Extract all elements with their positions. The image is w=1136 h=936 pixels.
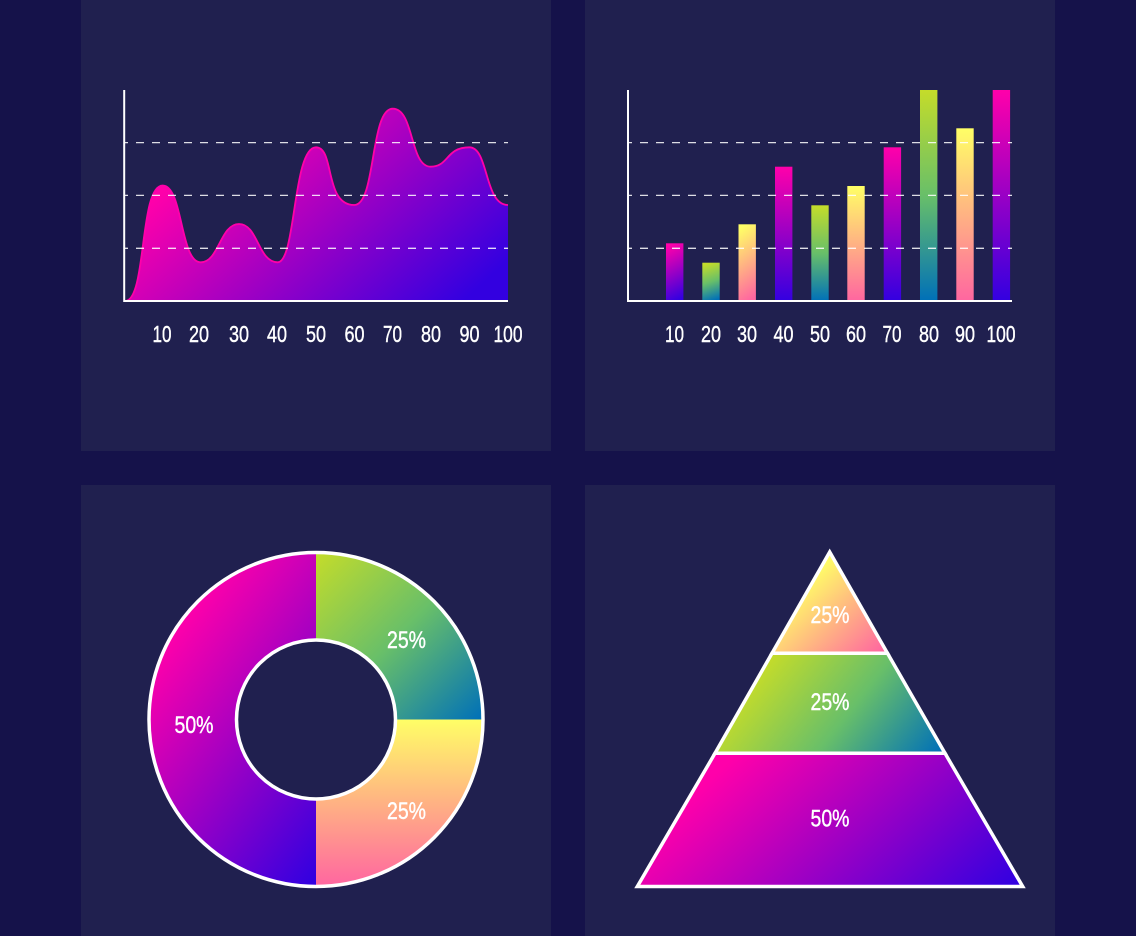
pyramid tier: top 25% — [772, 552, 888, 653]
bar chart axes — [628, 90, 1012, 301]
donut labels: 50% — [174, 712, 214, 739]
bars — [666, 90, 1010, 301]
area chart x labels: 60 — [344, 321, 364, 347]
area curve — [125, 109, 508, 301]
area chart x labels — [152, 321, 522, 347]
bar chart x labels: 10 — [665, 321, 684, 347]
bar chart x labels: 100 — [986, 321, 1016, 347]
panel: pyramid chart — [585, 485, 1055, 936]
area chart x labels: 30 — [229, 321, 249, 347]
pyramid tier: middle 25% — [715, 653, 945, 753]
bar chart x labels: 20 — [701, 321, 721, 347]
panel: donut chart — [81, 485, 551, 936]
pyramid labels: 25% — [810, 689, 850, 716]
donut labels: 25% — [387, 798, 426, 825]
bar chart x labels — [665, 321, 1016, 347]
donut outlines — [149, 552, 483, 886]
bar chart x labels: 80 — [919, 321, 939, 347]
area chart x labels: 90 — [460, 321, 480, 347]
bar chart x labels: 30 — [737, 321, 757, 347]
area chart x labels: 10 — [152, 321, 172, 347]
donut segment: 25% green — [316, 552, 483, 720]
area curve outline — [125, 109, 508, 301]
area chart x labels: 70 — [383, 321, 402, 347]
bar chart x labels: 70 — [882, 321, 902, 347]
pyramid labels: 25% — [810, 602, 850, 629]
donut segment: 50% — [149, 552, 316, 886]
area chart x labels: 80 — [421, 321, 441, 347]
donut labels — [174, 627, 426, 825]
pyramid labels: 50% — [810, 806, 850, 832]
area chart x labels: 100 — [494, 321, 522, 347]
bar chart x labels: 40 — [774, 321, 794, 347]
bar chart grid lines — [629, 143, 1012, 248]
pyramid tier: bottom 50% — [637, 753, 1023, 886]
bar chart x labels: 90 — [955, 321, 975, 347]
area chart x labels: 50 — [306, 321, 326, 347]
bar chart x labels: 50 — [810, 321, 830, 347]
donut labels: 25% — [387, 627, 426, 654]
donut segment: 25% yellow — [316, 720, 483, 886]
area chart x labels: 40 — [267, 321, 287, 347]
area chart axes — [124, 90, 508, 301]
bar chart x labels: 60 — [846, 321, 866, 347]
panel: area chart — [81, 0, 551, 451]
area chart x labels: 20 — [189, 321, 209, 347]
pyramid labels — [810, 602, 850, 832]
area chart grid lines — [125, 143, 508, 248]
panel: bar chart — [585, 0, 1055, 451]
